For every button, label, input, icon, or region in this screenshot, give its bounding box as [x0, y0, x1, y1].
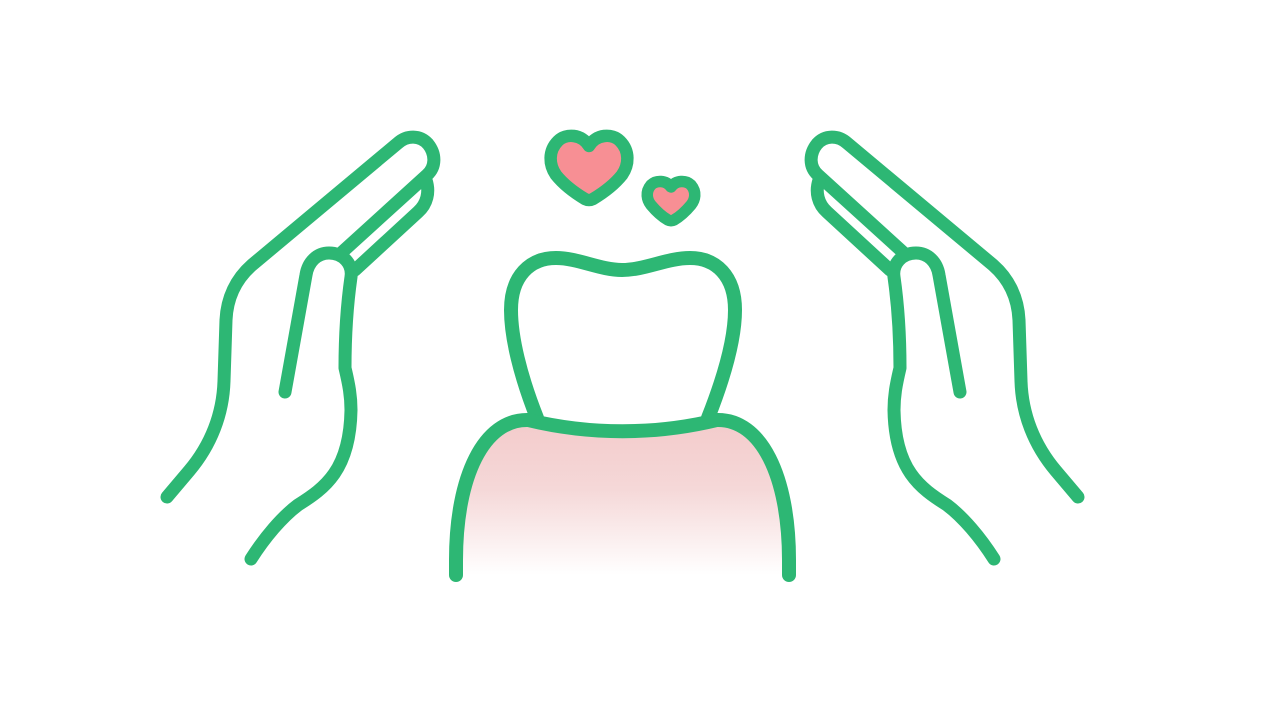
- icon: large heart: [551, 136, 627, 200]
- gum outline: [456, 420, 789, 575]
- icon: small heart: [647, 181, 695, 221]
- gum fill: [456, 420, 789, 575]
- icon: right hand: [811, 137, 1078, 559]
- icon: tooth crown: [511, 258, 735, 418]
- icon: left hand: [167, 137, 434, 559]
